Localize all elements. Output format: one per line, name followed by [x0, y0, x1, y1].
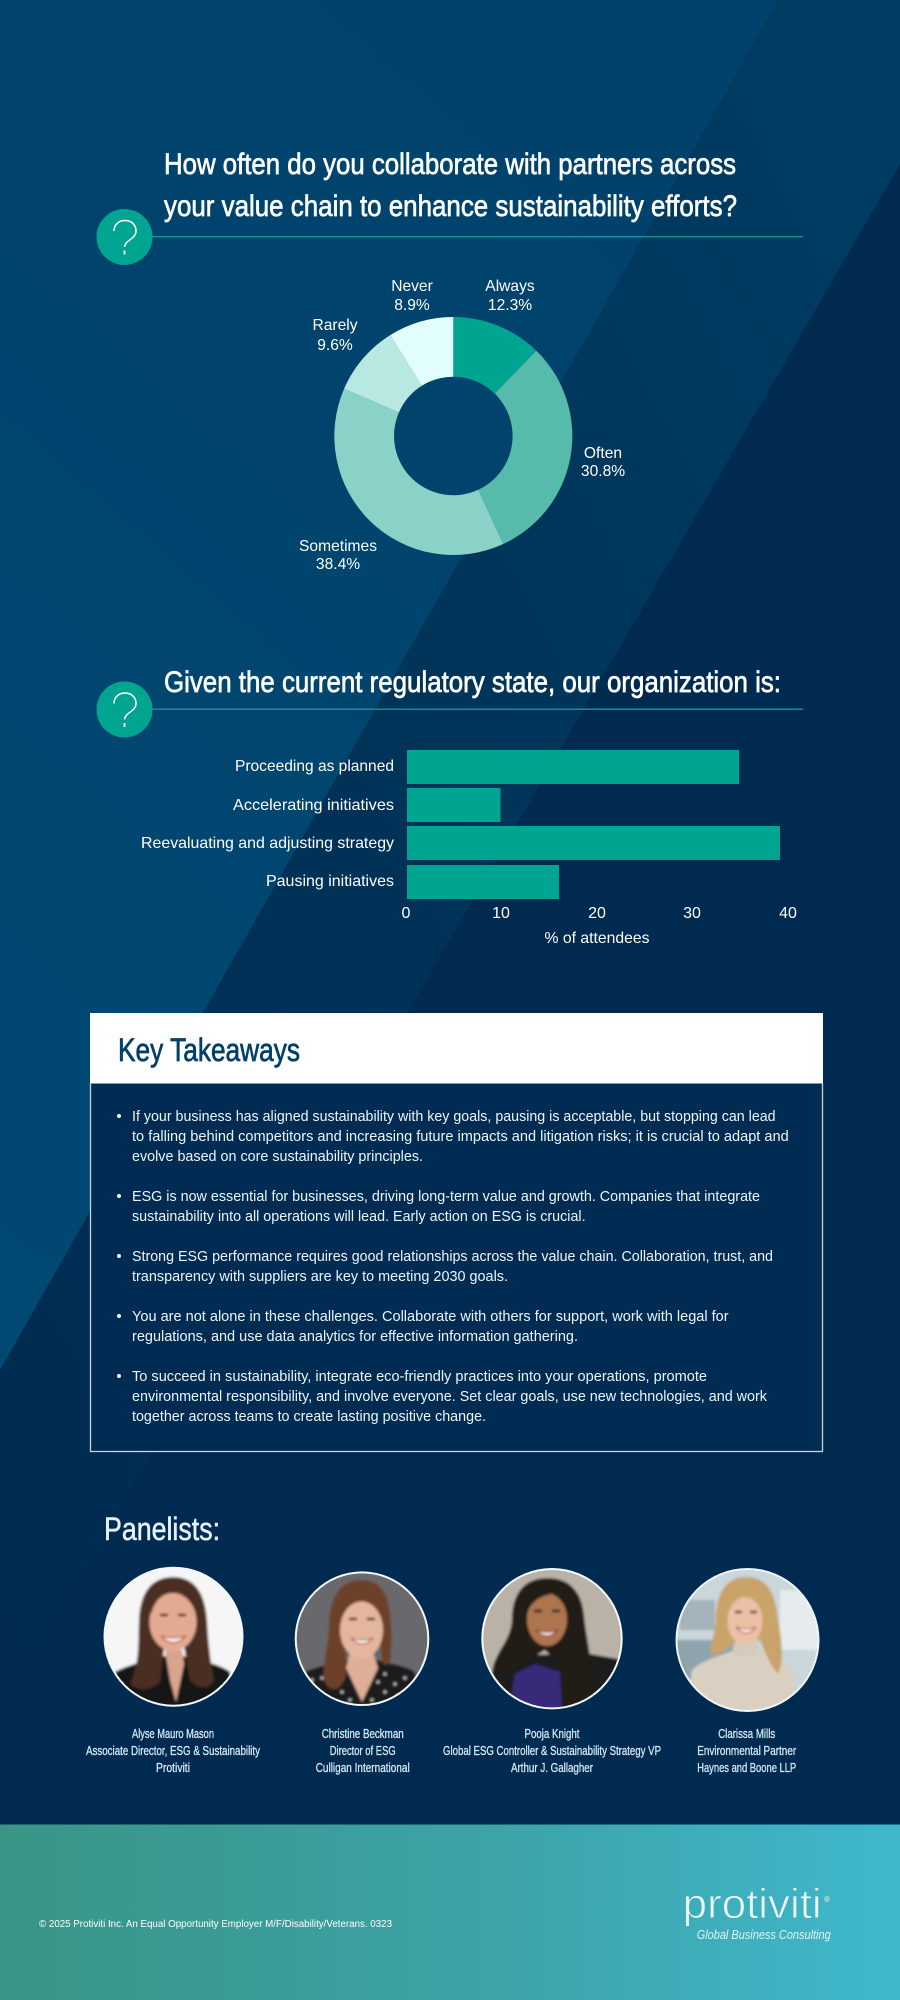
panelist caption: Alyse Mauro Mason: Associate Director, ESG & Sustainability: [86, 1744, 261, 1758]
takeaway 1: to falling behind competitors and increasing future impacts and litigation risks; it is crucial to adapt and: [132, 1129, 789, 1145]
takeaway 3: [117, 1249, 773, 1285]
panelist caption: Christine Beckman: Culligan International: [316, 1761, 410, 1775]
slice: always 12.3%: [453, 317, 536, 394]
category labels: [141, 758, 394, 890]
footer band: [0, 1824, 900, 2000]
axis tick labels: 10: [492, 905, 510, 922]
logo: protiviti: ®: [824, 1895, 830, 1904]
panelist caption: Christine Beckman: [316, 1727, 410, 1775]
takeaway 5: environmental responsibility, and involve everyone. Set clear goals, use new technologies, and work: [132, 1389, 768, 1405]
panelist portrait: Christine Beckman: [294, 1571, 430, 1706]
icon: question mark: [96, 209, 152, 265]
axis tick labels: 40: [779, 905, 797, 922]
copyright text: © 2025 Protiviti Inc. An Equal Opportunity Employer M/F/Disability/Veterans. 0323: [39, 1919, 392, 1930]
takeaway 3: transparency with suppliers are key to meeting 2030 goals.: [132, 1269, 508, 1285]
panelist caption: Pooja Knight: [443, 1727, 661, 1775]
panelist caption: Clarissa Mills: Haynes and Boone LLP: [697, 1761, 796, 1775]
slice: rarely 9.6%: [344, 335, 422, 412]
heading: regulatory question: Given the current regulatory state, our organization is:: [164, 666, 781, 699]
heading: collaboration question: [164, 148, 737, 223]
takeaway 3: Strong ESG performance requires good relationships across the value chain. Collaboration, trust, and: [132, 1249, 773, 1265]
panelist portrait: Clarissa Mills: [675, 1567, 821, 1713]
donut labels: 8.9%: [394, 297, 430, 314]
donut labels: Often: [584, 445, 622, 462]
takeaway 2: [117, 1189, 760, 1225]
axis tick labels: 20: [588, 905, 606, 922]
category labels: Accelerating initiatives: [233, 797, 394, 814]
logo: protiviti: protiviti: [683, 1880, 822, 1927]
category labels: Reevaluating and adjusting strategy: [141, 835, 394, 852]
panel: key takeaways: [90, 1013, 823, 1452]
takeaway 1: [117, 1109, 789, 1165]
slice: often 30.8%: [478, 351, 572, 544]
heading: collaboration question: your value chain to enhance sustainability efforts?: [164, 190, 737, 223]
donut labels: 38.4%: [316, 556, 360, 573]
heading: panelists: Panelists:: [104, 1511, 220, 1547]
takeaways header band: [90, 1013, 823, 1083]
takeaway 5: [117, 1369, 768, 1425]
panelist caption: Alyse Mauro Mason: Protiviti: [156, 1761, 190, 1775]
panelist portrait: Alyse Mauro Mason: [100, 1565, 250, 1710]
donut labels: Rarely: [312, 317, 358, 334]
logo: protiviti: Global Business Consulting: [697, 1928, 831, 1942]
axis title: % of attendees: [544, 930, 650, 947]
panelist caption: Pooja Knight: Arthur J. Gallagher: [511, 1761, 593, 1775]
panelist caption: Clarissa Mills: Clarissa Mills: [718, 1727, 775, 1741]
takeaway 4: regulations, and use data analytics for effective information gathering.: [132, 1329, 578, 1345]
takeaway 4: [117, 1309, 729, 1345]
axis tick labels: 0: [402, 905, 411, 922]
takeaway 5: together across teams to create lasting positive change.: [132, 1409, 486, 1425]
takeaway 4: You are not alone in these challenges. Collaborate with others for support, work with legal for: [132, 1309, 729, 1325]
donut labels: Never: [391, 278, 433, 295]
donut labels: Sometimes: [299, 538, 377, 555]
takeaway 2: ESG is now essential for businesses, driving long-term value and growth. Companies that integrate: [132, 1189, 760, 1205]
donut labels: 9.6%: [317, 337, 353, 354]
donut labels: 30.8%: [581, 463, 625, 480]
bar chart: organization response: [141, 750, 797, 947]
bars: [407, 750, 780, 899]
section: panelists: [86, 1511, 821, 1775]
panelist caption: Pooja Knight: Global ESG Controller & Sustainability Strategy VP: [443, 1744, 661, 1758]
donut labels: [299, 278, 625, 573]
panelist caption: Christine Beckman: Director of ESG: [330, 1744, 396, 1758]
donut labels: 12.3%: [488, 297, 532, 314]
category labels: Pausing initiatives: [266, 873, 394, 890]
axis tick labels: 30: [683, 905, 701, 922]
heading rule: [150, 236, 803, 237]
takeaway 5: To succeed in sustainability, integrate eco-friendly practices into your operations, promote: [132, 1369, 707, 1385]
panelist caption: Alyse Mauro Mason: Alyse Mauro Mason: [132, 1727, 214, 1741]
section: collaboration question: [96, 148, 803, 573]
panelist caption: Pooja Knight: Pooja Knight: [524, 1727, 580, 1741]
takeaways body: [90, 1083, 822, 1452]
axis tick labels: [402, 905, 797, 922]
donut labels: Always: [485, 278, 535, 295]
slice: sometimes 38.4%: [334, 389, 503, 555]
takeaway 1: evolve based on core sustainability principles.: [132, 1149, 423, 1165]
panelist caption: Clarissa Mills: Environmental Partner: [697, 1744, 796, 1758]
panelist caption: Christine Beckman: Christine Beckman: [322, 1727, 404, 1741]
section: regulatory question: [96, 666, 803, 947]
icon: question mark: [96, 682, 152, 738]
panelist caption: Clarissa Mills: [697, 1727, 796, 1775]
takeaway 1: If your business has aligned sustainability with key goals, pausing is acceptable, but stopping can lead: [132, 1109, 776, 1125]
panelist portrait: Pooja Knight: [480, 1566, 625, 1712]
heading: collaboration question: How often do you collaborate with partners across: [164, 148, 736, 181]
panelist caption: Alyse Mauro Mason: [86, 1727, 261, 1775]
donut chart: collaboration frequency: [299, 278, 625, 573]
logo: protiviti: [683, 1880, 831, 1942]
takeaway 2: sustainability into all operations will lead. Early action on ESG is crucial.: [132, 1209, 586, 1225]
slice: never 8.9%: [390, 317, 453, 386]
heading rule: [150, 708, 803, 710]
category labels: Proceeding as planned: [235, 758, 394, 775]
heading: key takeaways: Key Takeaways: [118, 1032, 300, 1068]
